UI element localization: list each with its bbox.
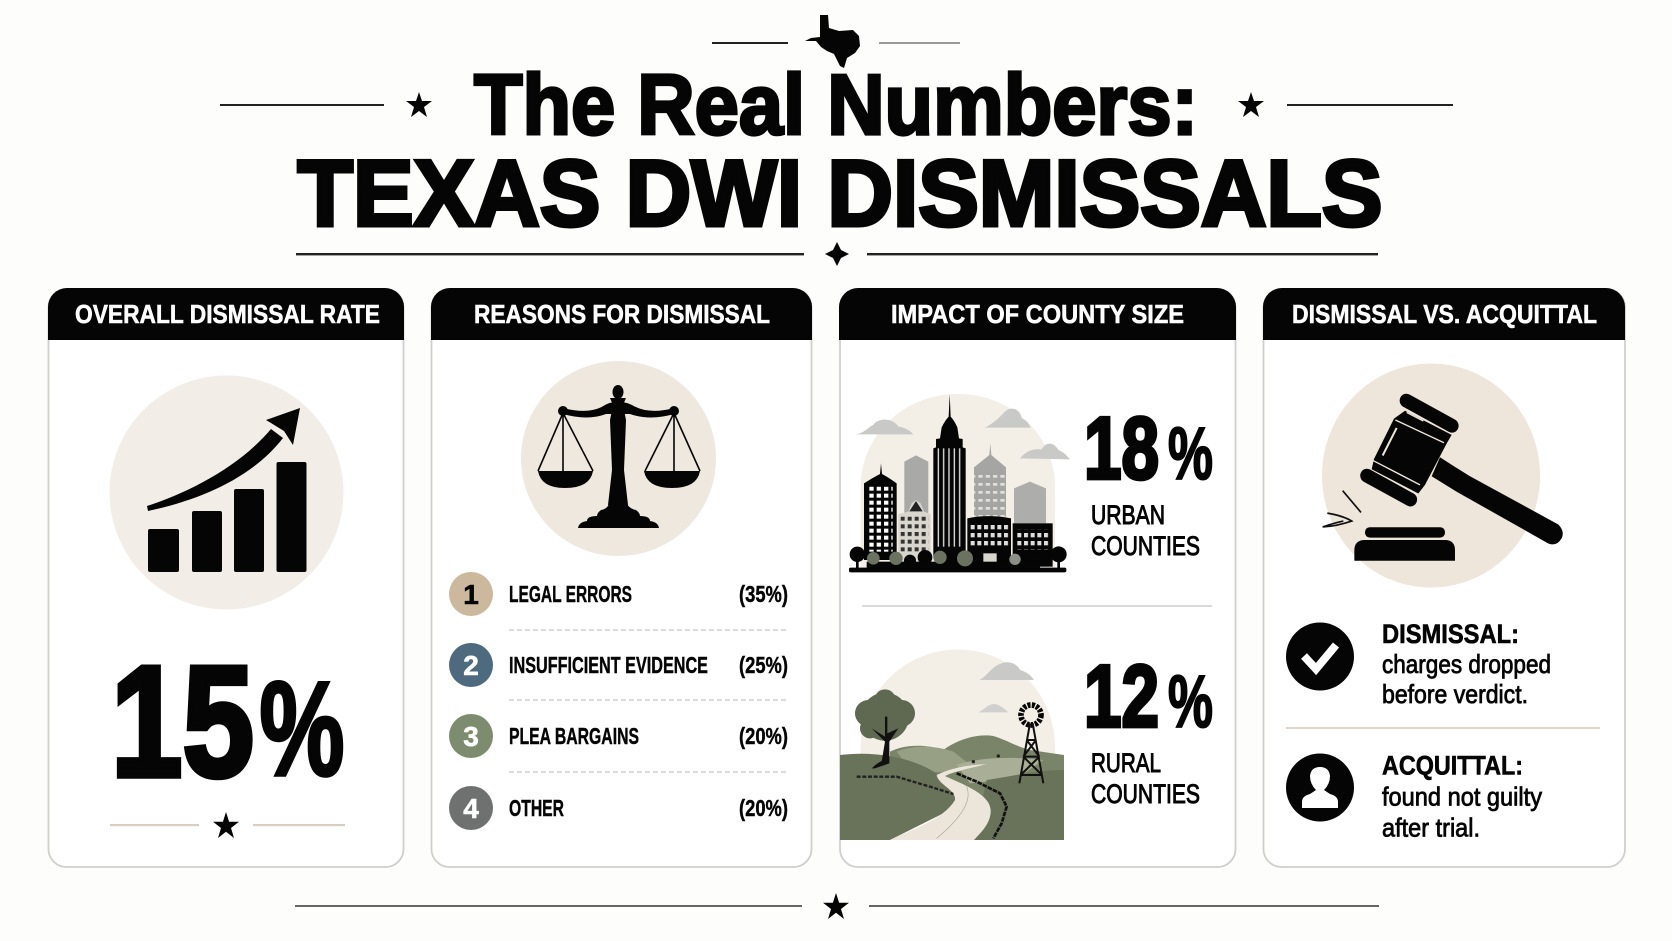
list item 3: (20%) bbox=[739, 723, 788, 749]
icon: check mark bbox=[1286, 622, 1354, 690]
stat: urban: % bbox=[1168, 412, 1213, 495]
list item 1 bbox=[449, 572, 788, 616]
list item 2: 2 bbox=[463, 650, 479, 681]
text: acquittal: ACQUITTAL: bbox=[1382, 750, 1523, 780]
text: acquittal bbox=[1382, 750, 1542, 842]
text: acquittal: after trial. bbox=[1382, 812, 1480, 842]
text: dismissal: before verdict. bbox=[1382, 679, 1528, 709]
panel header bbox=[431, 288, 812, 340]
list item 2: INSUFFICIENT EVIDENCE bbox=[509, 652, 708, 678]
stat: rural: % bbox=[1168, 660, 1213, 743]
panel: dismissal vs acquittal bbox=[1263, 288, 1625, 867]
list item 2 bbox=[449, 643, 788, 687]
title line 2: TEXAS DWI DISMISSALS bbox=[298, 140, 1382, 246]
text: dismissal: charges dropped bbox=[1382, 649, 1551, 679]
stat: urban: 18 bbox=[1084, 398, 1159, 498]
icon: city skyline bbox=[849, 394, 1070, 572]
icon: rising bar chart bbox=[110, 376, 344, 610]
panel: reasons for dismissal bbox=[431, 288, 812, 867]
title ornaments right bbox=[1238, 92, 1453, 117]
big stat: 15 bbox=[111, 634, 254, 810]
footer ornament bbox=[295, 893, 1379, 919]
icon: rural landscape bbox=[840, 650, 1064, 840]
list item 2: (25%) bbox=[739, 652, 788, 678]
icon: person bbox=[1286, 754, 1354, 822]
list item 1: LEGAL ERRORS bbox=[509, 581, 632, 607]
list item 1: (35%) bbox=[739, 581, 788, 607]
title ornaments left bbox=[220, 92, 432, 117]
label: urban counties: URBAN bbox=[1091, 500, 1165, 530]
panel: impact of county size bbox=[839, 288, 1236, 867]
list item 4: (20%) bbox=[739, 795, 788, 821]
title block bbox=[220, 15, 1453, 266]
label: urban counties bbox=[1091, 500, 1200, 561]
panel header bbox=[839, 288, 1236, 340]
label: rural counties: COUNTIES bbox=[1091, 779, 1200, 809]
label: rural counties bbox=[1091, 748, 1200, 809]
list item 4: OTHER bbox=[509, 795, 564, 821]
text: acquittal: found not guilty bbox=[1382, 782, 1542, 812]
icon: Texas silhouette with rules bbox=[712, 15, 960, 68]
panel header bbox=[48, 288, 404, 340]
big stat percent: % bbox=[260, 655, 344, 804]
label: rural counties: RURAL bbox=[1091, 748, 1161, 778]
icon: gavel bbox=[1322, 363, 1563, 588]
list item 4: 4 bbox=[463, 793, 479, 824]
text: dismissal: DISMISSAL: bbox=[1382, 619, 1519, 649]
heading: IMPACT OF COUNTY SIZE bbox=[891, 299, 1184, 329]
list item 1: 1 bbox=[463, 579, 479, 610]
list item 3: 3 bbox=[463, 721, 479, 752]
list item 4 bbox=[449, 786, 788, 830]
list item 3 bbox=[449, 714, 788, 758]
title line 1: The Real Numbers: bbox=[474, 58, 1198, 153]
heading: OVERALL DISMISSAL RATE bbox=[75, 299, 380, 329]
title rule with ornament bbox=[296, 242, 1378, 266]
star divider bbox=[110, 812, 345, 838]
heading: REASONS FOR DISMISSAL bbox=[474, 299, 770, 329]
label: urban counties: COUNTIES bbox=[1091, 531, 1200, 561]
panel: overall dismissal rate bbox=[48, 288, 404, 867]
icon: scales of justice bbox=[521, 361, 716, 556]
panel header bbox=[1263, 288, 1625, 340]
text: dismissal bbox=[1382, 619, 1551, 709]
list item 3: PLEA BARGAINS bbox=[509, 723, 639, 749]
heading: DISMISSAL VS. ACQUITTAL bbox=[1292, 299, 1597, 329]
stat: rural: 12 bbox=[1084, 646, 1159, 746]
